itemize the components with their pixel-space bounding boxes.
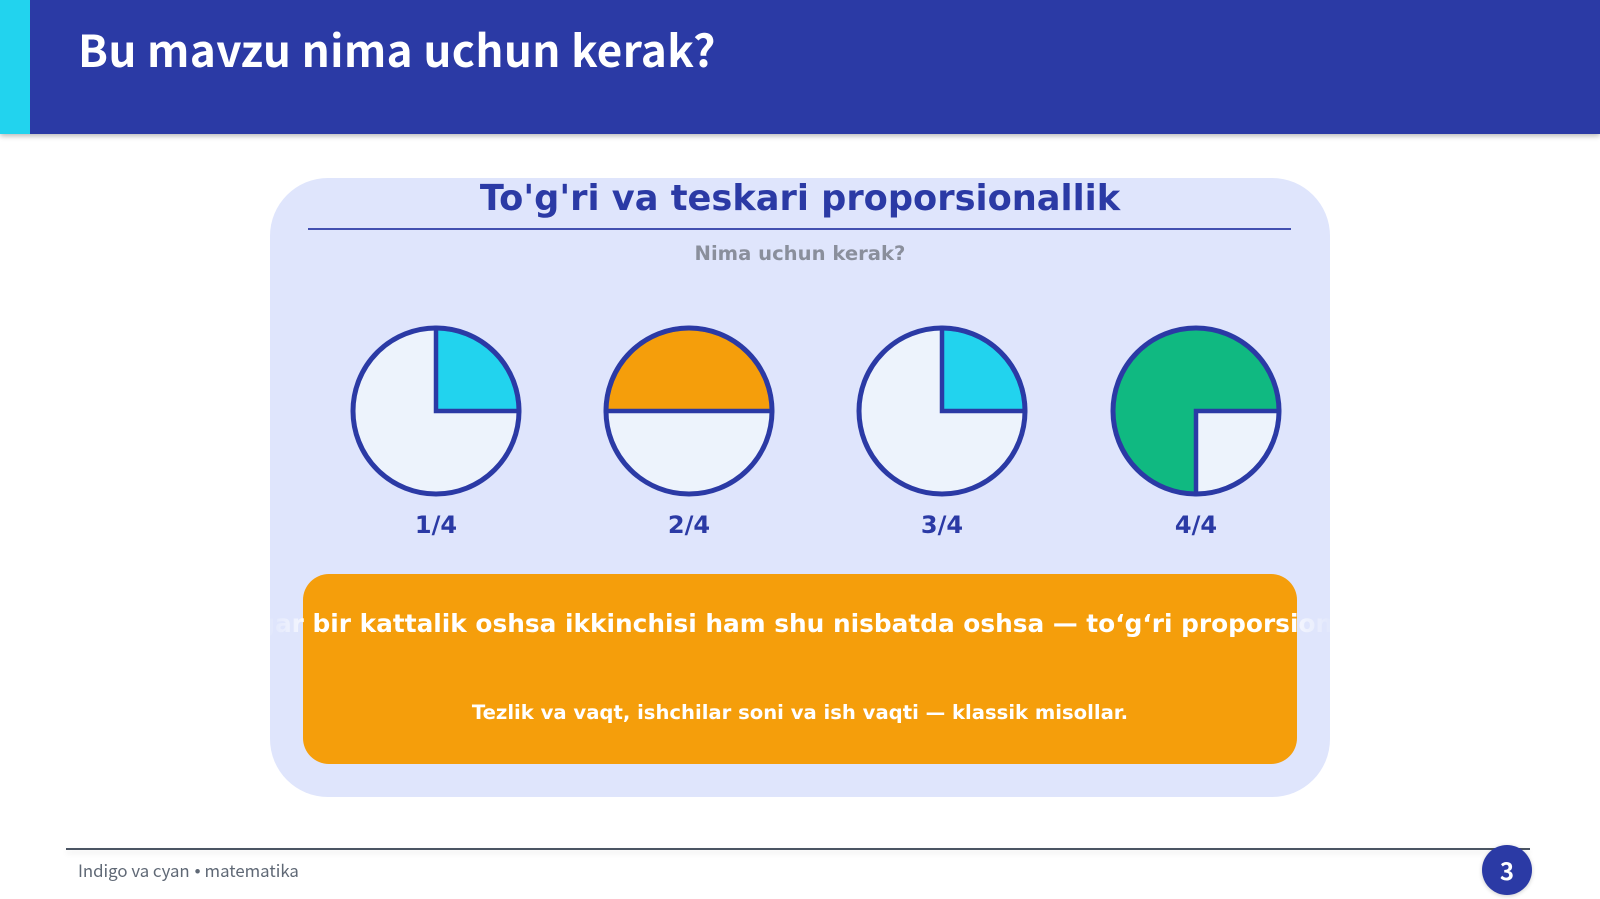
label: 4/4: 4/4 [1175, 511, 1217, 539]
pie: 3/4 [859, 328, 1025, 539]
header band [0, 0, 1600, 134]
heading rule [308, 228, 1291, 230]
callout secondary text: Tezlik va vaqt, ishchilar soni va ish vaqti — klassik misollar. [472, 701, 1128, 724]
label: 1/4: 1/4 [415, 511, 457, 539]
footer rule [66, 848, 1530, 850]
pie: 2/4 [606, 328, 772, 539]
footer text: Indigo va cyan •matematika [78, 858, 299, 882]
label: 3/4: 3/4 [921, 511, 963, 539]
page number badge [1482, 845, 1532, 895]
title: Bu mavzu nima uchun kerak? [78, 16, 716, 80]
panel: proportionality card [270, 178, 1330, 797]
callout box background [303, 574, 1297, 764]
pie: 1/4 [353, 328, 519, 539]
subtitle: Nima uchun kerak? [695, 242, 905, 265]
pie: 4/4 [1113, 328, 1279, 539]
label: 2/4: 2/4 [668, 511, 710, 539]
card heading: To'g'ri va teskari proporsionallik [480, 178, 1120, 219]
page number badge: 3 [1500, 852, 1514, 887]
pie charts [350, 326, 1282, 539]
cyan accent bar [0, 0, 30, 134]
